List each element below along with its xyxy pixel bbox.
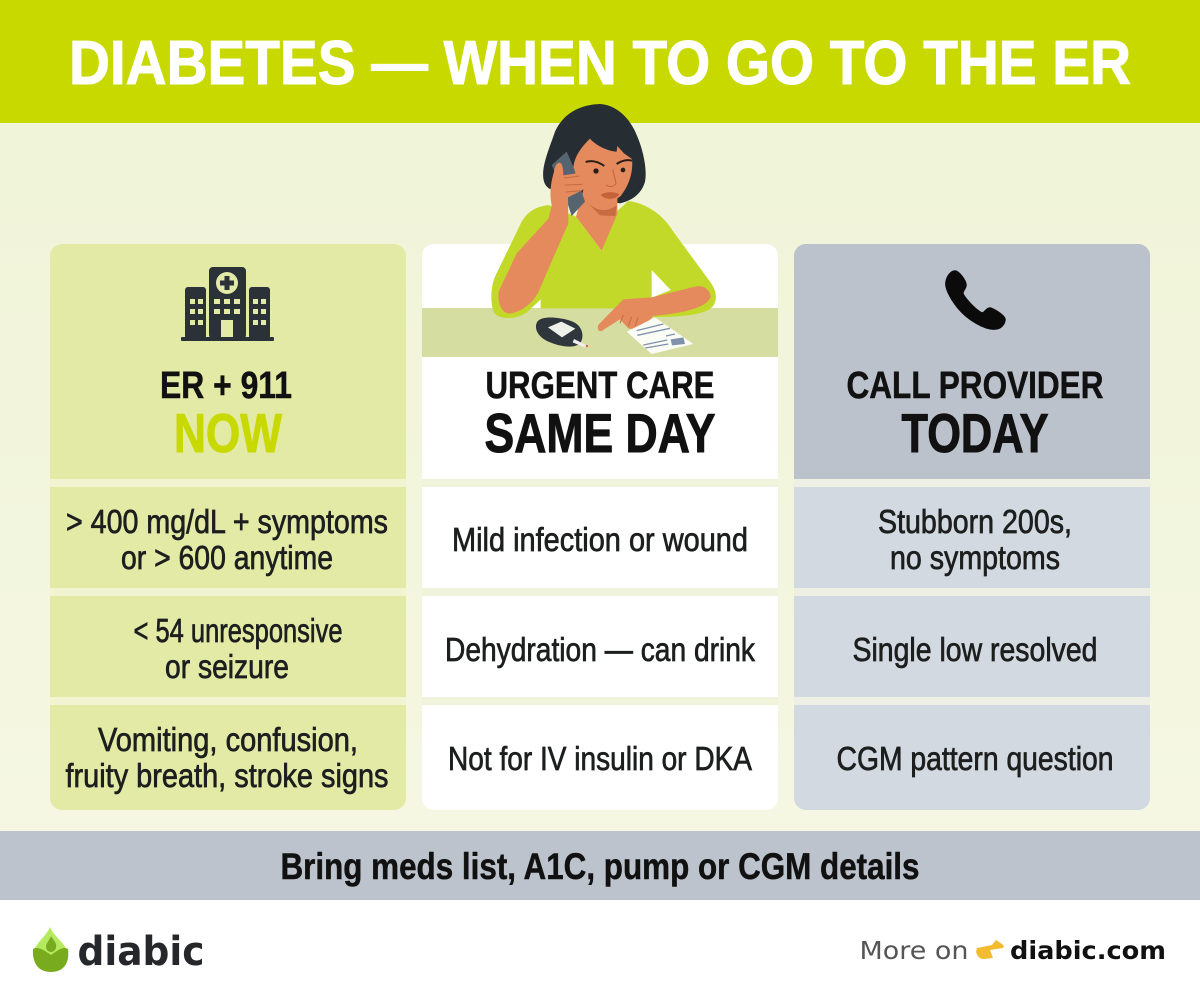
logo: diabic: diabic bbox=[78, 929, 204, 975]
heading: Urgent care same day: SAME DAY bbox=[484, 402, 716, 464]
text: provider row 1: Stubborn 200s, bbox=[878, 503, 1072, 540]
panel: Call provider bbox=[794, 244, 1150, 810]
text: ER row 3 bbox=[66, 721, 388, 794]
heading: Urgent care same day bbox=[484, 365, 716, 464]
text: provider row 1 bbox=[878, 503, 1072, 576]
text: provider row 2: Single low resolved bbox=[852, 631, 1098, 668]
heading: Call provider today: TODAY bbox=[902, 402, 1048, 464]
text: ER row 3: Vomiting, confusion, bbox=[98, 721, 358, 758]
text: urgent row 2: Dehydration — can drink bbox=[445, 631, 755, 668]
text: ER row 3: fruity breath, stroke signs bbox=[66, 757, 388, 794]
title banner: DIABETES — WHEN TO GO TO THE ER bbox=[69, 29, 1131, 98]
logo: diabic bbox=[33, 927, 205, 975]
text: ER row 2: or seizure bbox=[165, 648, 289, 685]
title banner bbox=[0, 0, 1200, 123]
text: urgent row 1: Mild infection or wound bbox=[452, 521, 748, 558]
heading: ER + 911 NOW: ER + 911 bbox=[160, 365, 292, 407]
footer bbox=[0, 900, 1200, 1000]
link: more on diabic.com: More on bbox=[860, 936, 968, 965]
heading: Call provider today: CALL PROVIDER bbox=[846, 365, 1104, 407]
bottom banner: Bring meds list, A1C, pump or CGM details bbox=[280, 846, 920, 887]
illustration: woman on phone at table bbox=[491, 104, 716, 354]
nose and lips bbox=[606, 169, 616, 187]
face bbox=[573, 139, 632, 202]
link: more on diabic.com: diabic.com bbox=[1010, 936, 1166, 965]
hair bbox=[543, 104, 646, 203]
forearm and hand on phone bbox=[498, 163, 584, 314]
text: ER row 2 bbox=[134, 612, 342, 685]
phone bbox=[552, 152, 585, 216]
text: ER row 2: < 54 unresponsive bbox=[134, 612, 342, 649]
icon: hospital bbox=[181, 267, 274, 341]
heading: ER + 911 NOW bbox=[160, 365, 292, 464]
paper bbox=[627, 317, 693, 354]
right arm and pointing hand bbox=[598, 286, 711, 331]
panel: Urgent care bbox=[422, 244, 778, 810]
text: urgent row 3: Not for IV insulin or DKA bbox=[448, 740, 752, 777]
shirt bbox=[491, 201, 716, 318]
text: ER row 1: or > 600 anytime bbox=[121, 539, 333, 576]
text: ER row 1 bbox=[66, 503, 388, 576]
icon: phone bbox=[946, 271, 1005, 329]
heading: Call provider today bbox=[846, 365, 1104, 464]
icon: pointing hand bbox=[976, 940, 1004, 959]
heading: ER + 911 NOW: NOW bbox=[174, 402, 282, 464]
panel: ER + 911 bbox=[50, 244, 406, 810]
text: provider row 3: CGM pattern question bbox=[836, 740, 1114, 777]
text: ER row 1: > 400 mg/dL + symptoms bbox=[66, 503, 388, 540]
text: provider row 1: no symptoms bbox=[890, 539, 1060, 576]
eyes and brows bbox=[593, 168, 599, 174]
bottom banner bbox=[0, 831, 1200, 900]
background bbox=[0, 123, 1200, 831]
neck bbox=[576, 190, 617, 251]
link: more on diabic.com bbox=[860, 936, 1166, 965]
heading: Urgent care same day: URGENT CARE bbox=[486, 365, 714, 407]
glucose meter bbox=[536, 318, 582, 347]
